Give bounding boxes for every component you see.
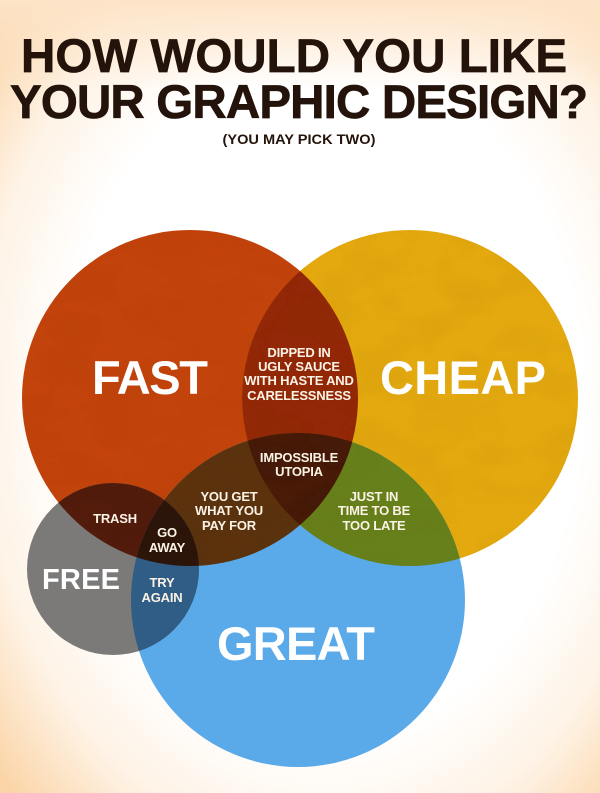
- label: trash: TRASH: [93, 511, 137, 526]
- label: dipped in ugly sauce: [244, 345, 354, 403]
- label: fast: FAST: [92, 351, 208, 404]
- overlap: fast and cheap: [242, 271, 358, 442]
- label: try again: TRY: [150, 575, 175, 590]
- label: dipped in ugly sauce: DIPPED IN: [267, 345, 331, 360]
- circle: free: [27, 483, 199, 655]
- overlap: fast, cheap and great: [248, 433, 352, 525]
- label: impossible utopia: [260, 450, 339, 479]
- label: try again: [142, 575, 182, 605]
- label: free: FREE: [42, 564, 120, 596]
- overlap: free, fast and great: [136, 500, 199, 566]
- label: dipped in ugly sauce: WITH HASTE AND: [244, 373, 354, 388]
- watercolor texture: cheap: [240, 228, 580, 568]
- subtitle: (YOU MAY PICK TWO): [222, 132, 376, 147]
- label: try again: AGAIN: [142, 590, 182, 605]
- overlap: fast and great: [164, 433, 352, 566]
- label: just in time: TOO LATE: [343, 518, 406, 533]
- label: go away: GO: [157, 525, 177, 540]
- title: [10, 30, 588, 129]
- label: you get what you pay for: WHAT YOU: [195, 503, 263, 518]
- label: just in time: TIME TO BE: [338, 503, 411, 518]
- label: just in time: [338, 489, 411, 533]
- label: you get what you pay for: PAY FOR: [202, 518, 257, 533]
- overlap: cheap and great: [248, 433, 460, 566]
- label: you get what you pay for: [195, 489, 263, 533]
- circle: great: [131, 433, 465, 767]
- circle: cheap: [242, 230, 578, 566]
- overlap: free and fast: [58, 483, 164, 558]
- title: HOW WOULD YOU LIKE: [21, 30, 567, 83]
- label: impossible utopia: IMPOSSIBLE: [260, 450, 339, 465]
- label: cheap: CHEAP: [380, 351, 546, 404]
- label: you get what you pay for: YOU GET: [200, 489, 258, 504]
- label: great: GREAT: [217, 617, 375, 670]
- label: dipped in ugly sauce: CARELESSNESS: [247, 388, 351, 403]
- label: go away: AWAY: [149, 540, 186, 555]
- title: YOUR GRAPHIC DESIGN?: [10, 76, 588, 129]
- label: impossible utopia: UTOPIA: [275, 464, 324, 479]
- overlap: free and great: [131, 500, 199, 651]
- label: just in time: JUST IN: [350, 489, 398, 504]
- watercolor texture: fast: [20, 228, 360, 568]
- circle: fast: [22, 230, 358, 566]
- label: dipped in ugly sauce: UGLY SAUCE: [258, 359, 340, 374]
- label: go away: [149, 525, 186, 555]
- venn diagram: [22, 230, 578, 767]
